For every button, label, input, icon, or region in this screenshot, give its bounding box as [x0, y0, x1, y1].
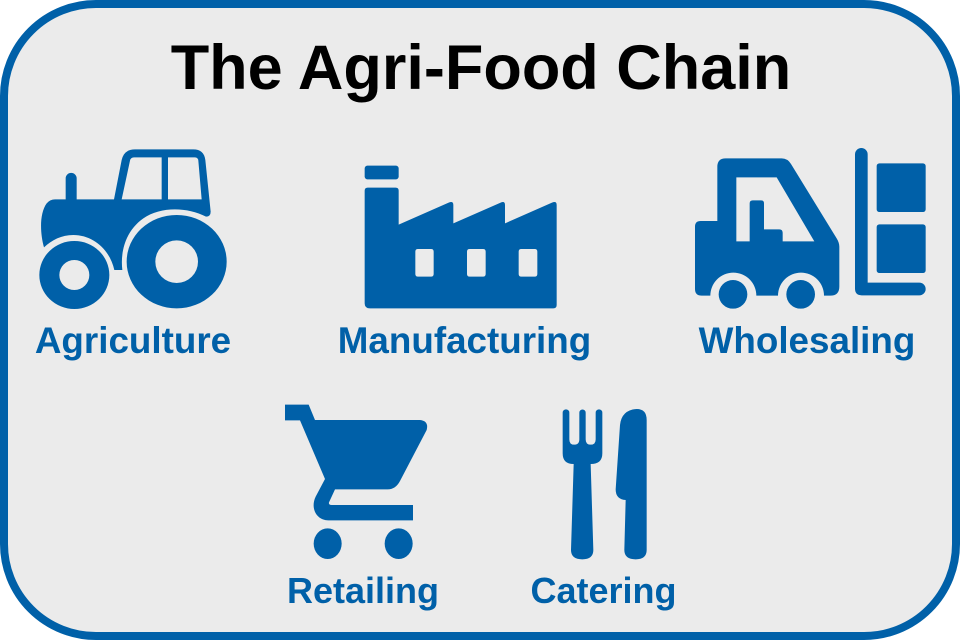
icon: forklift [695, 148, 926, 309]
title: The Agri-Food Chain [171, 33, 791, 103]
label: Catering: Catering [530, 570, 677, 611]
label: Wholesaling: Wholesaling [699, 320, 915, 361]
label: Retailing: Retailing [287, 570, 439, 611]
icon: fork and knife [563, 409, 647, 559]
label: Agriculture: Agriculture [35, 320, 231, 361]
icon: shopping cart [285, 405, 427, 559]
icon: factory [365, 166, 557, 308]
label: Manufacturing: Manufacturing [338, 320, 591, 361]
icon: tractor [39, 149, 227, 309]
